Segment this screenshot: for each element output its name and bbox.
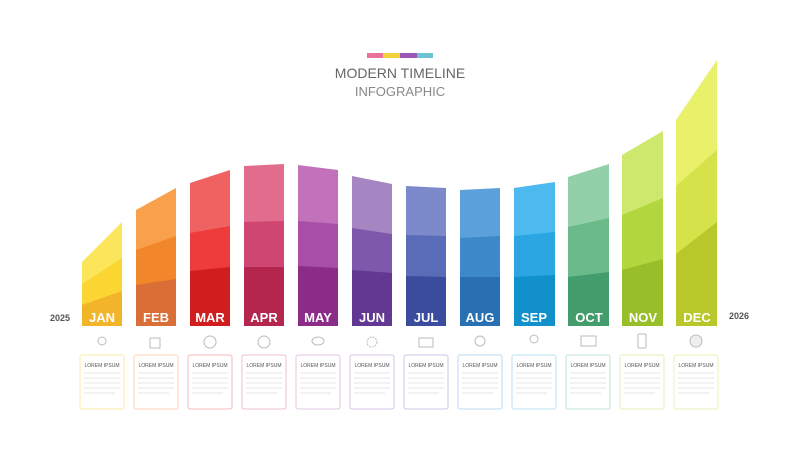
card: OCT: LOREM IPSUM bbox=[570, 363, 606, 369]
column: JUL bbox=[406, 186, 446, 326]
card: JAN: LOREM IPSUM bbox=[84, 363, 120, 369]
card: DEC bbox=[674, 335, 718, 409]
card: JUL: LOREM IPSUM bbox=[408, 363, 444, 369]
column: NOV: NOV bbox=[629, 310, 657, 325]
column: JUL: JUL bbox=[414, 310, 438, 325]
card: JUL bbox=[404, 338, 448, 409]
column: JAN bbox=[82, 222, 122, 326]
column: DEC bbox=[676, 60, 717, 326]
column: APR bbox=[244, 164, 284, 326]
title: INFOGRAPHIC bbox=[355, 84, 445, 99]
column: SEP: SEP bbox=[521, 310, 547, 325]
card: SEP bbox=[512, 335, 556, 409]
card: FEB: LOREM IPSUM bbox=[138, 363, 174, 369]
card: JUN bbox=[350, 337, 394, 409]
card: APR bbox=[242, 336, 286, 409]
column: OCT: OCT bbox=[575, 310, 603, 325]
column: MAY bbox=[298, 165, 338, 326]
column: APR: APR bbox=[250, 310, 278, 325]
card: JUN: LOREM IPSUM bbox=[354, 363, 390, 369]
column: AUG bbox=[460, 188, 500, 326]
title: MODERN TIMELINE bbox=[335, 65, 465, 81]
column: JUN: JUN bbox=[359, 310, 385, 325]
column: MAY: MAY bbox=[304, 310, 332, 325]
column: JUN bbox=[352, 176, 392, 326]
year 2026: 2026 bbox=[729, 311, 749, 321]
card: JAN bbox=[80, 337, 124, 409]
title bbox=[335, 53, 465, 99]
cards row bbox=[80, 334, 718, 409]
column: AUG: AUG bbox=[466, 310, 494, 325]
column: DEC: DEC bbox=[683, 310, 711, 325]
column: MAR bbox=[190, 170, 230, 326]
bar chart columns bbox=[82, 60, 717, 326]
card: NOV bbox=[620, 334, 664, 409]
card: AUG bbox=[458, 336, 502, 409]
card: AUG: LOREM IPSUM bbox=[462, 363, 498, 369]
year 2025: 2025 bbox=[50, 313, 70, 323]
column: JAN: JAN bbox=[89, 310, 115, 325]
column: OCT bbox=[568, 164, 609, 326]
card: MAR: LOREM IPSUM bbox=[192, 363, 228, 369]
card: MAY: LOREM IPSUM bbox=[300, 363, 336, 369]
column: FEB: FEB bbox=[143, 310, 169, 325]
card: DEC: LOREM IPSUM bbox=[678, 363, 714, 369]
card: MAY bbox=[296, 337, 340, 409]
card: FEB bbox=[134, 338, 178, 409]
column: SEP bbox=[514, 182, 555, 326]
card: OCT bbox=[566, 336, 610, 409]
card: MAR bbox=[188, 336, 232, 409]
column: MAR: MAR bbox=[195, 310, 225, 325]
column: FEB bbox=[136, 188, 176, 326]
card: APR: LOREM IPSUM bbox=[246, 363, 282, 369]
card: NOV: LOREM IPSUM bbox=[624, 363, 660, 369]
card: SEP: LOREM IPSUM bbox=[516, 363, 552, 369]
column: NOV bbox=[622, 131, 663, 326]
